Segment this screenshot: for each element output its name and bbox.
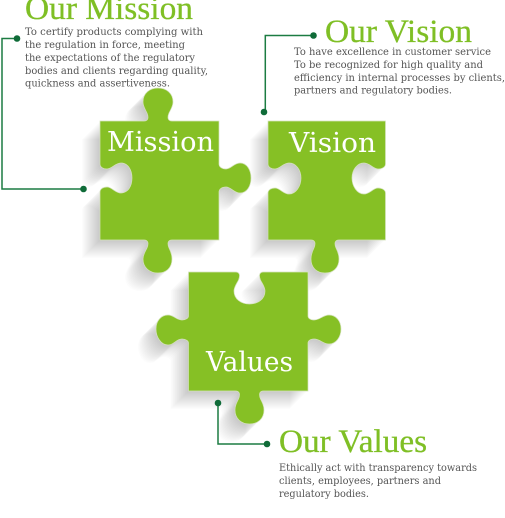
text block: values description bbox=[279, 463, 477, 500]
connector: Vision bbox=[261, 32, 317, 115]
connector: Mission bbox=[2, 35, 87, 192]
text block: mission description: the regulation in force, meeting bbox=[25, 40, 185, 51]
text block: mission description bbox=[25, 27, 208, 90]
puzzle piece: Values bbox=[138, 272, 341, 442]
text block: mission description: quickness and assertiveness. bbox=[25, 78, 170, 90]
connector: Values bbox=[215, 400, 270, 447]
text block: mission description: To certify products complying with bbox=[25, 27, 203, 38]
puzzle piece: Mission bbox=[82, 88, 251, 291]
text block: vision description: efficiency in internal processes by clients, bbox=[294, 73, 505, 84]
text block: values description: Ethically act with transparency towards bbox=[279, 463, 477, 474]
text block: vision description: To be recognized for high quality and bbox=[294, 60, 483, 71]
puzzle piece: Values: Values bbox=[205, 347, 293, 378]
puzzle piece: Vision: Vision bbox=[288, 128, 376, 159]
heading: Our Vision: Our Vision bbox=[325, 14, 472, 50]
text block: vision description: partners and regulatory bodies. bbox=[294, 86, 452, 96]
text block: mission description: bodies and clients regarding quality, bbox=[25, 66, 208, 77]
text block: mission description: the expectations of the regulatory bbox=[25, 53, 195, 64]
text block: vision description bbox=[294, 47, 505, 96]
heading: Our Values: Our Values bbox=[279, 424, 427, 460]
puzzle piece: Vision bbox=[250, 121, 386, 291]
text block: vision description: To have excellence in customer service bbox=[294, 47, 491, 58]
puzzle piece: Mission: Mission bbox=[107, 127, 214, 158]
text block: values description: regulatory bodies. bbox=[279, 489, 369, 500]
text block: values description: clients, employees, partners and bbox=[279, 476, 441, 487]
